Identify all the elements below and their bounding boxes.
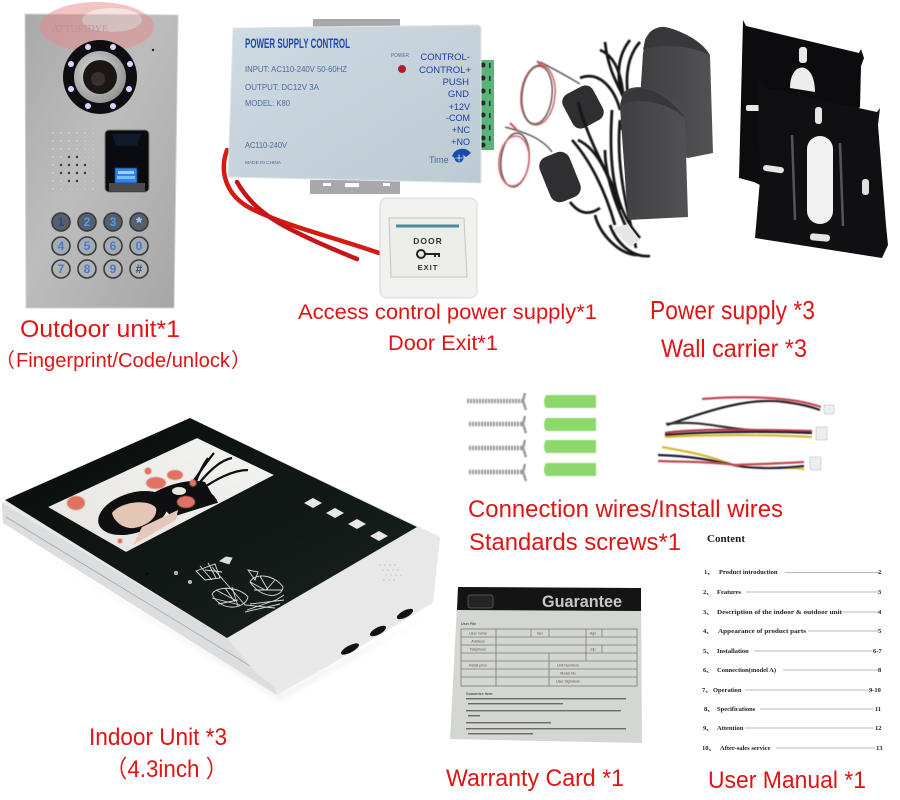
monitor body <box>2 418 440 695</box>
table of contents: After-sales service <box>720 745 771 752</box>
box specs: MODEL: K80 <box>245 98 290 108</box>
connectors <box>810 405 834 470</box>
user file table: Sex <box>537 632 543 636</box>
card sheet <box>450 587 642 743</box>
user file table: Address <box>471 640 485 644</box>
keypad: 5 <box>84 239 91 253</box>
hair <box>98 452 248 535</box>
box specs: OUTPUT: DC12V 3A <box>245 82 319 92</box>
user file table: Age <box>590 632 596 636</box>
label: wall carrier: Wall carrier *3 <box>661 335 807 363</box>
screws <box>467 393 526 481</box>
manual title: Content <box>707 534 746 545</box>
label: user manual: User Manual *1 <box>708 767 866 794</box>
label: standard screws: Standards screws*1 <box>469 529 681 556</box>
power supply box: Time <box>429 155 449 165</box>
box title: POWER SUPPLY CONTROL <box>245 35 350 51</box>
speaker holes <box>379 564 402 581</box>
label: outdoor unit: Outdoor unit*1 <box>20 316 180 343</box>
table of contents: 7、 <box>702 687 712 694</box>
user file table: Unit Numbers <box>557 664 579 668</box>
card header <box>457 587 641 611</box>
table of contents: Specifications <box>717 706 756 713</box>
outdoor faceplate <box>25 14 178 308</box>
terminal labels: GND <box>448 89 469 100</box>
watermark: ATTURIDYE <box>52 24 108 35</box>
card title: Guarantee <box>542 592 622 611</box>
front adapter <box>620 87 688 220</box>
indicator dots <box>146 571 192 584</box>
front wall carrier <box>755 80 888 258</box>
panel: wall carriers <box>661 20 888 363</box>
table of contents: Description of the indoor & outdoor unit <box>717 609 843 616</box>
icon: fingerprint reader <box>105 130 149 192</box>
table of contents: 2 <box>878 569 881 576</box>
monitor side wall <box>2 503 277 695</box>
keypad: # <box>136 262 143 276</box>
panel: power adapters <box>496 27 815 325</box>
panel: access control power supply <box>224 19 597 355</box>
user file table: Model No <box>560 672 576 676</box>
user file table: User Signature <box>556 680 580 684</box>
keypad: * <box>136 215 143 232</box>
terminal labels: -COM <box>446 113 470 123</box>
rear wall carrier <box>739 20 864 190</box>
pigtail leads <box>496 61 580 188</box>
table of contents: 10、 <box>702 745 715 752</box>
terminal labels: +NC <box>452 125 470 135</box>
plug <box>612 224 640 247</box>
user file table <box>461 622 637 686</box>
icon: door exit button: EXIT <box>418 263 438 272</box>
keypad <box>52 213 148 278</box>
keypad: 0 <box>136 239 143 253</box>
user file table: User name <box>469 632 487 636</box>
ferrite chokes <box>536 82 607 205</box>
keypad: 3 <box>110 215 117 229</box>
table of contents: 3、 <box>703 609 713 616</box>
keypad: 1 <box>58 215 65 229</box>
label: screen size: （4.3inch ） <box>105 756 228 783</box>
icon: power LED <box>398 65 406 73</box>
table of contents: 1、 <box>704 569 714 576</box>
label: power supply: Power supply *3 <box>650 295 815 325</box>
terminal labels: CONTROL- <box>420 52 470 63</box>
buttons <box>304 498 388 541</box>
box specs: INPUT: AC110-240V 50-60HZ <box>245 64 347 74</box>
panel: outdoor unit <box>20 2 180 343</box>
box specs <box>245 53 409 165</box>
panel: fingerprint label: ） <box>231 349 251 372</box>
black face <box>5 418 417 638</box>
label: door exit: Door Exit*1 <box>388 332 498 355</box>
keypad: 9 <box>110 262 117 276</box>
flowers <box>67 468 196 544</box>
power supply box <box>228 25 481 183</box>
table of contents: 12 <box>875 725 882 732</box>
icon: camera <box>63 40 154 114</box>
panel: screws and anchors <box>467 393 596 481</box>
user file table: Zip <box>590 648 596 652</box>
icon: time dial <box>452 149 471 162</box>
user file table: User File <box>461 622 476 626</box>
table of contents: 9-10 <box>869 687 881 694</box>
label: warranty card: Warranty Card *1 <box>446 765 624 792</box>
lotus line art <box>196 557 284 612</box>
keypad: 6 <box>110 239 117 253</box>
table of contents: 8、 <box>704 706 714 713</box>
table of contents: Installation <box>717 648 749 655</box>
user file table: Telephone <box>470 648 486 652</box>
rear adapter <box>640 28 713 158</box>
terminal labels: +NO <box>451 137 470 147</box>
table of contents: 6-7 <box>873 648 882 655</box>
cord bundle <box>570 40 650 256</box>
label: indoor unit: Indoor Unit *3 <box>89 724 227 751</box>
table of contents: 5、 <box>703 648 713 655</box>
label: access control power supply: Access control power supply*1 <box>298 301 597 324</box>
panel: user manual <box>702 534 883 794</box>
box specs: POWER <box>391 53 409 59</box>
icon: door exit button: DOOR <box>413 236 443 246</box>
panel: warranty card <box>446 587 642 792</box>
table of contents: 13 <box>876 745 883 752</box>
table of contents: 11 <box>875 706 881 713</box>
table of contents: 4 <box>878 609 882 616</box>
user file table: Retail price <box>469 664 487 668</box>
red wires <box>224 150 379 259</box>
terminal labels <box>419 52 471 147</box>
terminal block <box>480 60 494 150</box>
keypad: 7 <box>58 262 65 276</box>
box specs: AC110-240V <box>245 140 287 150</box>
box specs: MADE IN CHINA <box>245 160 281 165</box>
table of contents: Attention <box>717 725 744 732</box>
keypad: 4 <box>58 239 65 253</box>
table of contents <box>702 569 883 752</box>
table of contents: Connection(model A) <box>717 667 776 674</box>
table of contents: 8 <box>878 667 882 674</box>
panel: fingerprint label: Fingerprint/Code/unlock <box>16 350 231 372</box>
icon: speaker grille <box>52 132 94 190</box>
green wall anchors <box>544 395 596 476</box>
drop shadow <box>30 545 435 700</box>
label: connection wires: Connection wires/Install wires <box>468 496 783 523</box>
table of contents: 6、 <box>703 667 713 674</box>
panel: connection wires <box>658 397 834 470</box>
icon: door exit button <box>380 198 477 298</box>
terminal labels: PUSH <box>443 77 469 88</box>
table of contents: 4、 <box>703 628 713 635</box>
monitor front chin <box>227 527 440 689</box>
table of contents: Features <box>717 589 742 596</box>
table of contents: Operation <box>713 687 742 694</box>
table of contents: Appearance of product parts <box>718 628 807 635</box>
keypad: 2 <box>84 215 91 229</box>
wire harnesses <box>658 397 821 469</box>
watermark <box>40 2 154 52</box>
table of contents: Product introduction <box>719 569 778 576</box>
table of contents: 9、 <box>703 725 713 732</box>
terminal labels: +12V <box>449 102 470 112</box>
screen <box>48 438 274 552</box>
keypad: 8 <box>84 262 91 276</box>
guarantee terms: Guarantee Item: <box>466 692 493 696</box>
panel: indoor unit <box>2 418 440 783</box>
table of contents: 5 <box>878 628 882 635</box>
terminal labels: CONTROL+ <box>419 65 471 76</box>
table of contents: 2、 <box>703 589 713 596</box>
table of contents: 3 <box>878 589 882 596</box>
mounting tabs <box>310 19 400 194</box>
connector ports <box>340 607 415 657</box>
face <box>112 502 156 528</box>
